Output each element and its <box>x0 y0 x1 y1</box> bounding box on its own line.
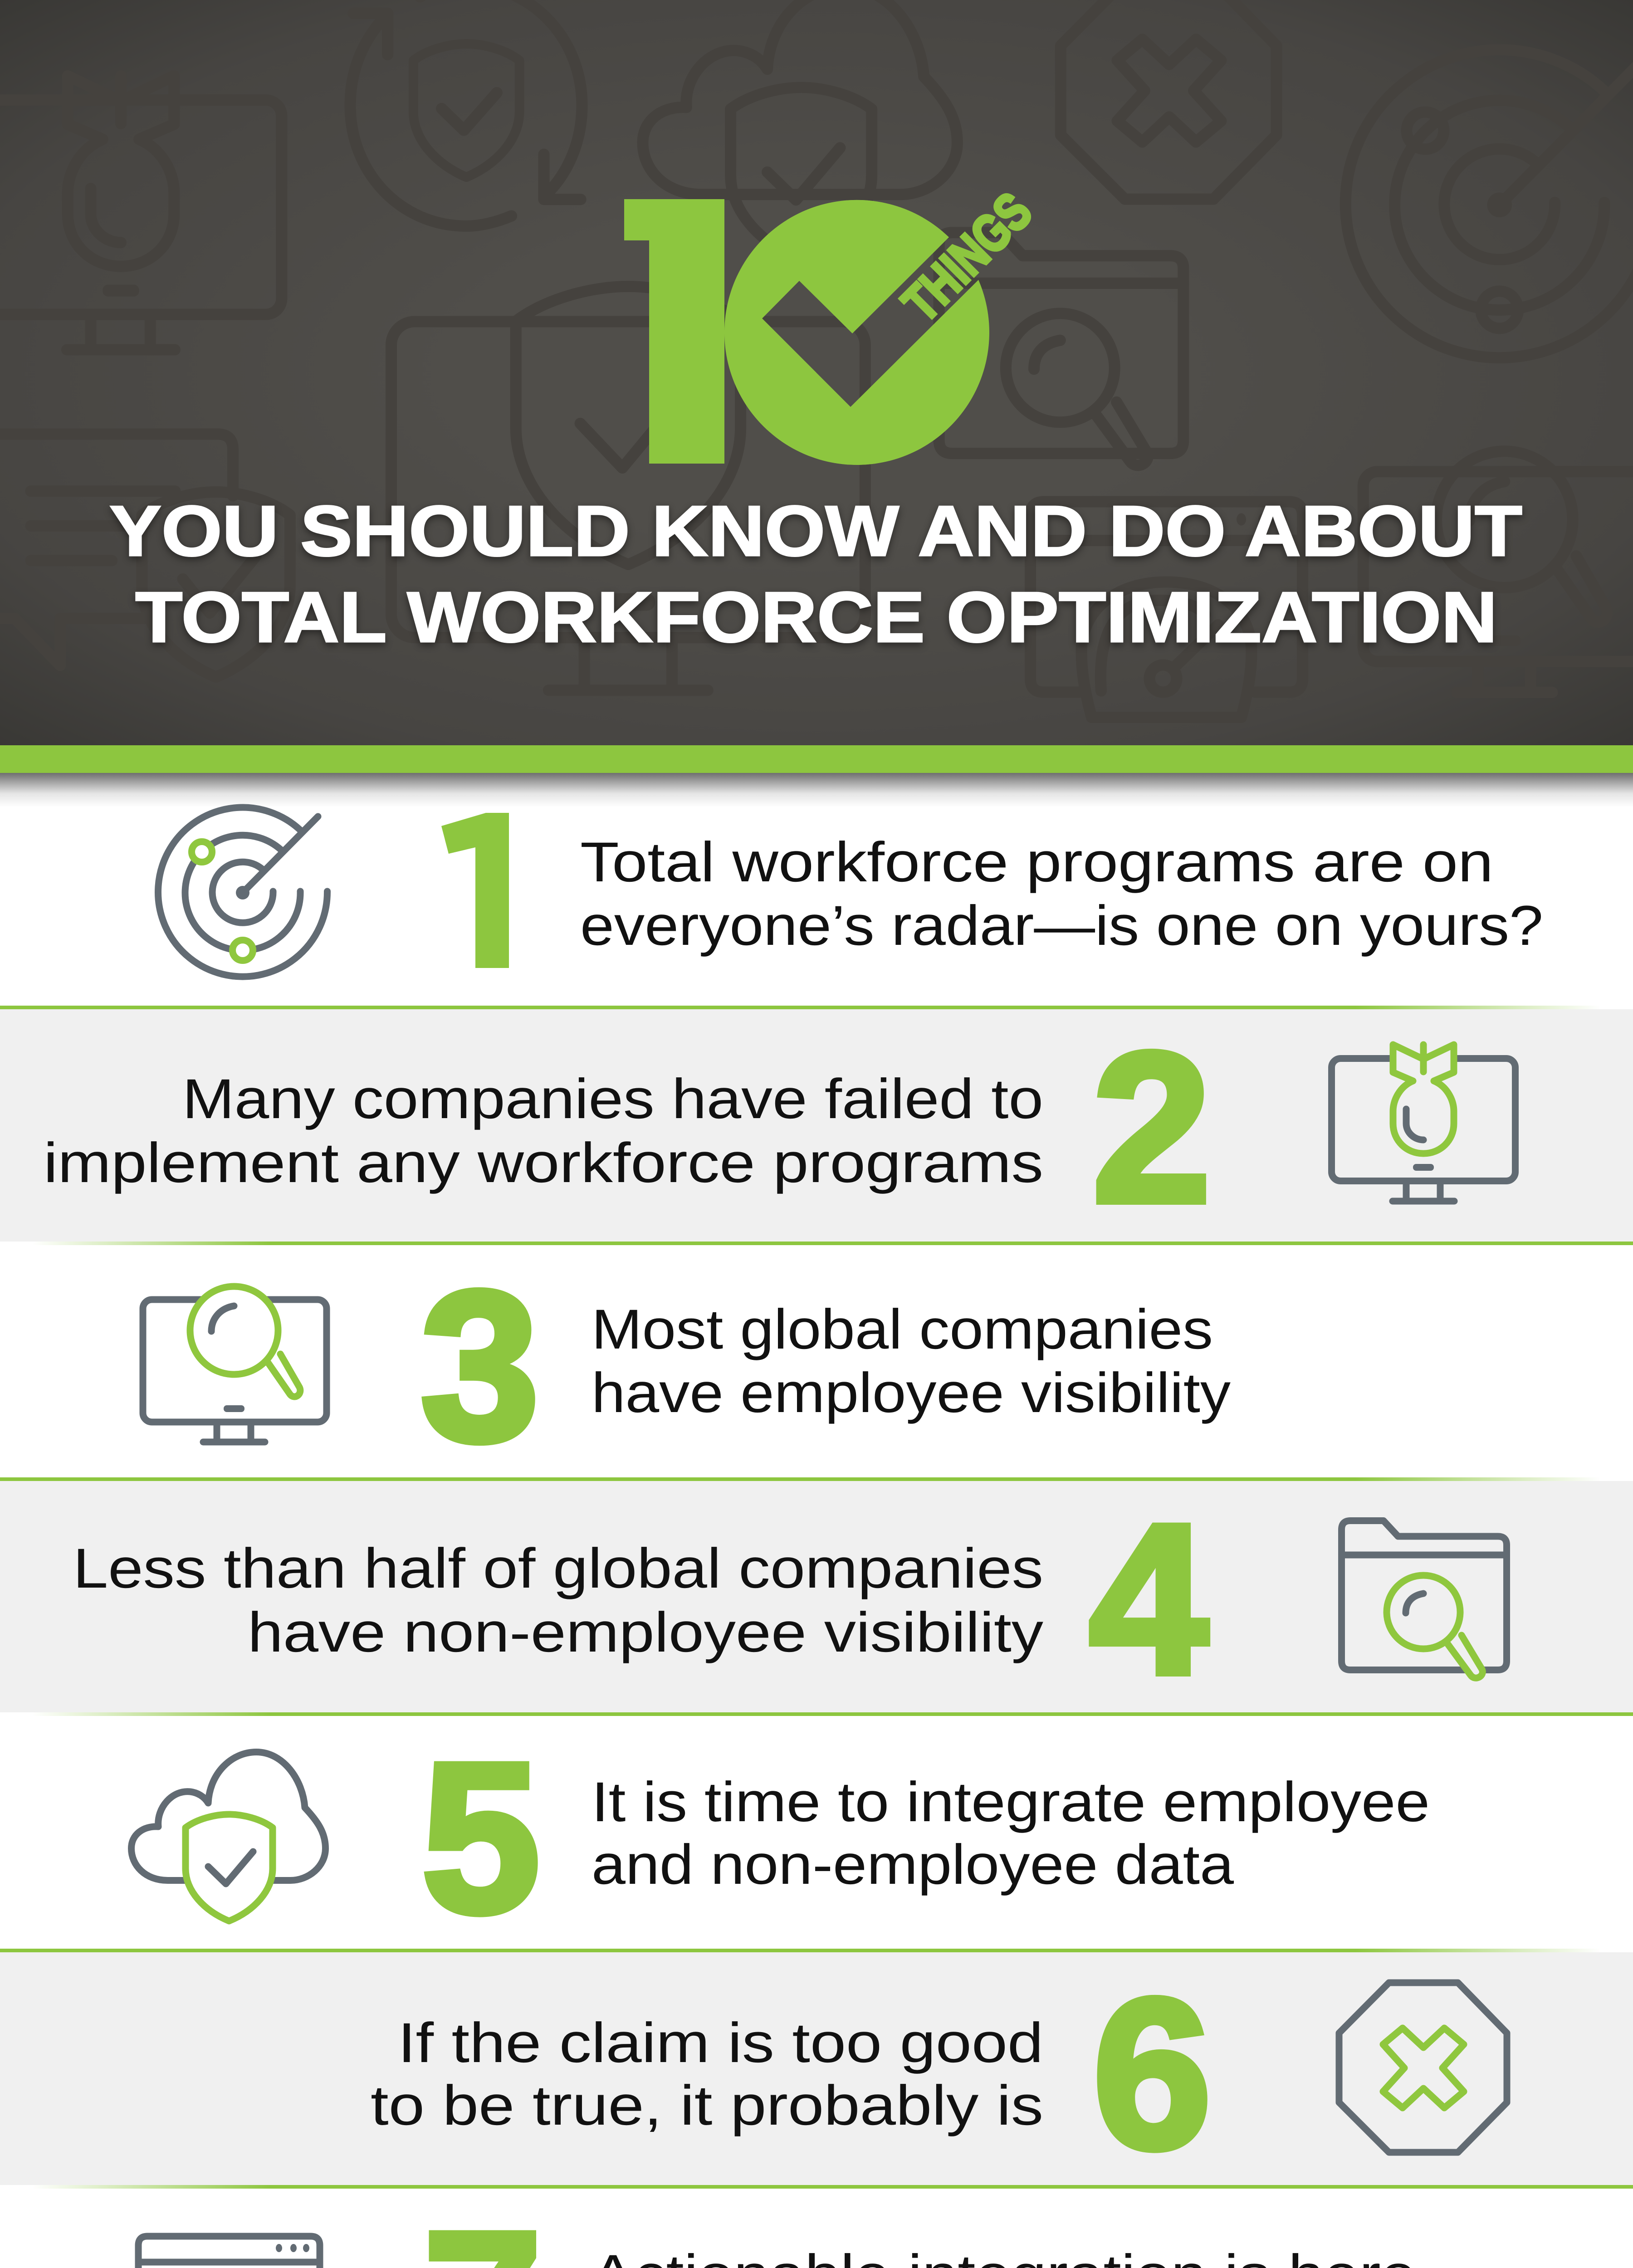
text: item 5: It is time to integrate employee <box>592 1771 1430 1833</box>
logo numeral 1: 1 <box>562 94 789 550</box>
number 2: 2 <box>1092 1008 1211 1246</box>
text: item 6 <box>371 2012 1043 2137</box>
panel: item 4 <box>0 1480 1633 1718</box>
number 4: 4 <box>1089 1480 1209 1718</box>
icon: cloud with shield <box>132 1752 326 1921</box>
icon: monitor with magnifier <box>143 1286 327 1442</box>
number 5: 5 <box>421 1719 540 1957</box>
text: item 2: Many companies have failed to <box>182 1068 1043 1130</box>
icon: folder with magnifier <box>1342 1520 1507 1678</box>
icon: browser with gauge <box>138 2236 320 2268</box>
text: item 2 <box>44 1068 1043 1194</box>
text: item 1 <box>580 831 1543 957</box>
panel: item 5 <box>132 1719 1430 1957</box>
icon: monitor with bomb <box>1332 1045 1515 1201</box>
text: item 3 <box>592 1298 1231 1424</box>
text: item 4: Less than half of global companies <box>73 1537 1043 1600</box>
title <box>109 491 1522 657</box>
text: item 1: Total workforce programs are on <box>580 831 1493 894</box>
logo numeral 0 with check: 0 <box>743 107 970 563</box>
number 1: 1 <box>421 775 540 1013</box>
text: item 1: everyone’s radar—is one on yours? <box>580 894 1543 957</box>
panel: item 2 <box>0 1008 1633 1246</box>
text: item 5: and non-employee data <box>592 1833 1234 1896</box>
number 3: 3 <box>420 1247 539 1485</box>
text: item 3: Most global companies <box>592 1298 1213 1361</box>
text: item 4 <box>73 1537 1043 1664</box>
header background icon pattern <box>0 0 1633 717</box>
logo word: things: THINGS <box>891 181 1043 333</box>
text: item 3: have employee visibility <box>592 1362 1231 1424</box>
panel: item 6 <box>0 1952 1633 2193</box>
number 6: 6 <box>1093 1955 1212 2193</box>
text: item 5 <box>592 1771 1430 1896</box>
panel: item 1 <box>158 775 1543 1013</box>
logo: 10 with check mark <box>624 193 1032 465</box>
text: item 6: to be true, it probably is <box>371 2074 1043 2137</box>
title: TOTAL WORKFORCE OPTIMIZATION <box>135 577 1497 657</box>
header green bar and shadow <box>0 745 1633 807</box>
panel: header <box>0 0 1633 745</box>
text: item 4: have non-employee visibility <box>248 1601 1043 1664</box>
text: item 2: implement any workforce programs <box>44 1132 1043 1194</box>
icon: octagon with X <box>1339 1983 1507 2152</box>
panel: item 7 <box>138 2188 1416 2268</box>
title: YOU SHOULD KNOW AND DO ABOUT <box>109 491 1522 571</box>
text: item 6: If the claim is too good <box>398 2012 1043 2074</box>
panel: item 3 <box>143 1247 1231 1485</box>
icon: radar <box>158 807 328 977</box>
